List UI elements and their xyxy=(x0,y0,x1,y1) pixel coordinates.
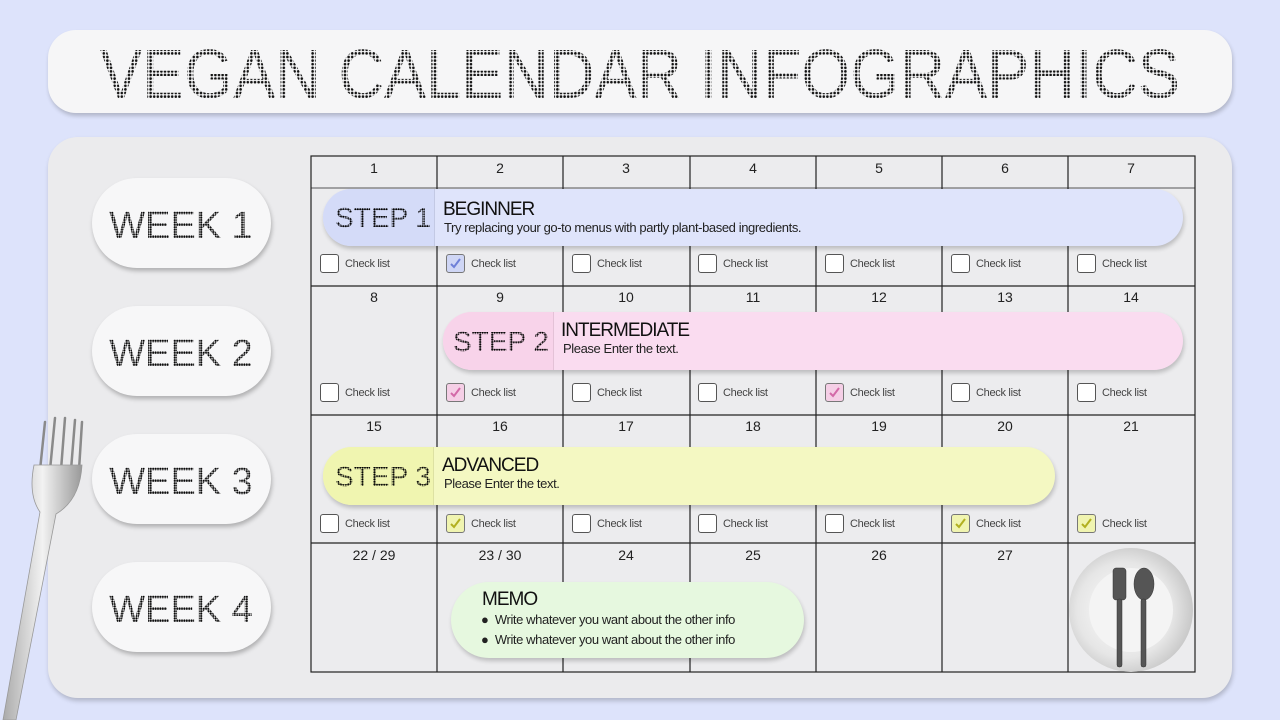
day numbers: 10 xyxy=(618,289,634,305)
day numbers: 24 xyxy=(618,547,634,563)
step 3 bar xyxy=(323,447,1055,505)
week 4: WEEK 4 xyxy=(109,589,253,631)
day numbers: 5 xyxy=(875,160,883,176)
checklists: Check list xyxy=(723,518,768,530)
step 3 bar: STEP 3 xyxy=(335,461,431,492)
day numbers: 15 xyxy=(366,418,382,434)
day numbers: 12 xyxy=(871,289,887,305)
day numbers: 4 xyxy=(749,160,757,176)
day numbers: 26 xyxy=(871,547,887,563)
step 1 bar xyxy=(323,189,1183,246)
week 1: WEEK 1 xyxy=(109,205,253,247)
day numbers: 23 / 30 xyxy=(479,547,521,563)
checklists: Check list xyxy=(1102,518,1147,530)
checklists: Check list xyxy=(345,518,390,530)
checklists: Check list xyxy=(1102,387,1147,399)
checklists: Check list xyxy=(1102,258,1147,270)
step 2 bar xyxy=(443,312,1183,370)
step 1 bar: Try replacing your go-to menus with partly plant-based ingredients. xyxy=(444,220,801,235)
day numbers: 3 xyxy=(622,160,630,176)
step 1 bar: BEGINNER xyxy=(443,199,534,220)
day numbers: 11 xyxy=(746,289,760,305)
checklists: Check list xyxy=(597,258,642,270)
day numbers xyxy=(353,160,1139,563)
checklists: Check list xyxy=(345,258,390,270)
checklists: Check list xyxy=(976,518,1021,530)
memo: ● Write whatever you want about the other info xyxy=(481,612,735,627)
checklists: Check list xyxy=(850,518,895,530)
day numbers: 7 xyxy=(1127,160,1135,176)
checklists: Check list xyxy=(471,518,516,530)
day numbers: 19 xyxy=(871,418,887,434)
day numbers: 27 xyxy=(997,547,1013,563)
checklists: Check list xyxy=(471,387,516,399)
day numbers: 9 xyxy=(496,289,504,305)
day numbers: 2 xyxy=(496,160,504,176)
step 2 bar: INTERMEDIATE xyxy=(561,320,689,341)
day numbers: 1 xyxy=(370,160,378,176)
week labels xyxy=(90,178,274,658)
week 2 xyxy=(92,306,271,396)
day numbers: 13 xyxy=(997,289,1013,305)
week 1 xyxy=(92,178,271,268)
checklists: Check list xyxy=(723,258,768,270)
memo xyxy=(451,582,804,658)
week 3: WEEK 3 xyxy=(109,461,253,503)
week 3 xyxy=(92,434,271,524)
step 3 bar: ADVANCED xyxy=(442,455,538,476)
checklists: Check list xyxy=(597,518,642,530)
day numbers: 17 xyxy=(618,418,634,434)
checklists: Check list xyxy=(850,387,895,399)
day numbers: 18 xyxy=(745,418,761,434)
day numbers: 8 xyxy=(370,289,378,305)
checklists: Check list xyxy=(471,258,516,270)
checklists: Check list xyxy=(723,387,768,399)
day numbers: 16 xyxy=(492,418,508,434)
memo: MEMO xyxy=(482,589,537,610)
checklists: Check list xyxy=(850,258,895,270)
day numbers: 25 xyxy=(745,547,761,563)
step 3 bar: Please Enter the text. xyxy=(444,476,560,491)
checklists xyxy=(320,254,1147,533)
calendar grid xyxy=(310,155,1196,673)
day numbers: 22 / 29 xyxy=(353,547,395,563)
checklists: Check list xyxy=(597,387,642,399)
day numbers: 21 xyxy=(1123,418,1139,434)
day numbers: 14 xyxy=(1123,289,1139,305)
week 4 xyxy=(92,562,271,652)
checklists: Check list xyxy=(976,387,1021,399)
day numbers: 20 xyxy=(997,418,1013,434)
step 2 bar: STEP 2 xyxy=(453,326,549,357)
day numbers: 6 xyxy=(1001,160,1009,176)
icon: fork xyxy=(2,416,84,720)
step 2 bar: Please Enter the text. xyxy=(563,341,678,356)
step 1 bar: STEP 1 xyxy=(335,202,431,233)
checklists: Check list xyxy=(976,258,1021,270)
checklists: Check list xyxy=(345,387,390,399)
icon: plate with fork and spoon xyxy=(1069,548,1193,672)
main panel xyxy=(48,137,1232,698)
week 2: WEEK 2 xyxy=(109,333,253,375)
memo: ● Write whatever you want about the other info xyxy=(481,632,735,647)
